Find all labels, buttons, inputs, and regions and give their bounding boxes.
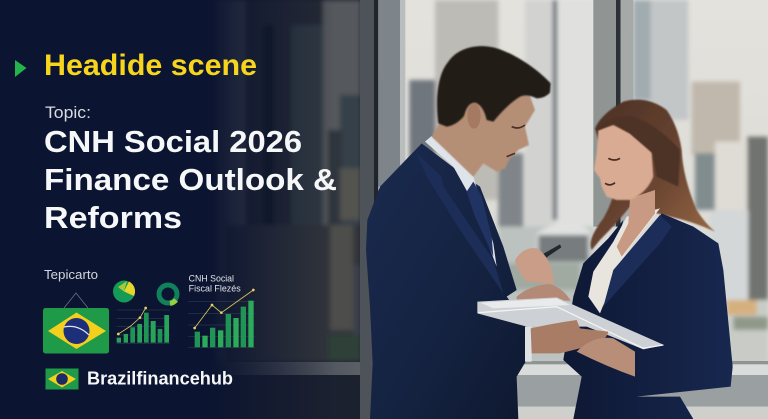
left skyline behind overlay [215, 0, 361, 362]
pie chart [113, 280, 135, 302]
man jacket [366, 143, 527, 419]
woman face [594, 125, 653, 200]
man neck and face [432, 87, 535, 177]
woman neck [617, 190, 655, 257]
icon: green play arrow [15, 60, 26, 77]
icon: Brazil flag card [43, 293, 109, 354]
woman eye and lips [605, 158, 620, 185]
donut chart [159, 285, 177, 304]
man hair [437, 46, 551, 127]
window sill strip on the left [130, 362, 361, 375]
small bar and line chart [117, 307, 170, 343]
man lapel [417, 153, 503, 293]
frame [360, 0, 374, 419]
man tie [467, 182, 493, 257]
upper hands and pen [515, 244, 571, 302]
man shirt [425, 136, 497, 267]
title [44, 124, 337, 235]
document folder [477, 297, 664, 349]
dark navy gradient overlay on the left [0, 0, 335, 419]
eyebrow heading with arrow [15, 49, 257, 82]
title: CNH Social 2026 [44, 124, 302, 159]
large bar and line chart: CNH Social Fiscal Flezés: Fiscal Flezés [189, 284, 241, 294]
woman blouse [588, 208, 660, 313]
woman jacket [563, 213, 733, 419]
far skyline [409, 0, 768, 363]
woman hair [591, 100, 715, 250]
man [366, 46, 551, 419]
pen [538, 244, 561, 260]
woman [563, 100, 733, 419]
man upper hand [517, 284, 571, 302]
photo: two business people [366, 46, 733, 419]
large bar and line chart: CNH Social Fiscal Flezés [188, 274, 255, 347]
brand name: Brazilfinancehub [87, 368, 233, 388]
title: Reforms [44, 200, 182, 235]
woman hair over forehead [596, 116, 680, 187]
man eye and mouth [507, 125, 525, 157]
woman lower hand [577, 338, 635, 377]
icon: small Brazil flag [46, 368, 78, 390]
heading: Headide scene: Headide scene [44, 49, 257, 82]
title: Finance Outlook & [44, 162, 337, 197]
lower hands and cuffs [525, 320, 635, 377]
large bar and line chart: CNH Social Fiscal Flezés: CNH Social [189, 274, 234, 284]
man ear [467, 103, 481, 129]
woman writing hand [515, 248, 554, 284]
brand logo [46, 368, 233, 390]
caption: Tepicarto: Tepicarto [44, 268, 98, 282]
window panes and frame [360, 0, 768, 419]
topic label: Topic: [45, 103, 91, 122]
man lower hand [531, 320, 608, 353]
man shirt cuff [525, 327, 532, 362]
window sill [517, 361, 768, 365]
woman lapel [603, 215, 672, 307]
